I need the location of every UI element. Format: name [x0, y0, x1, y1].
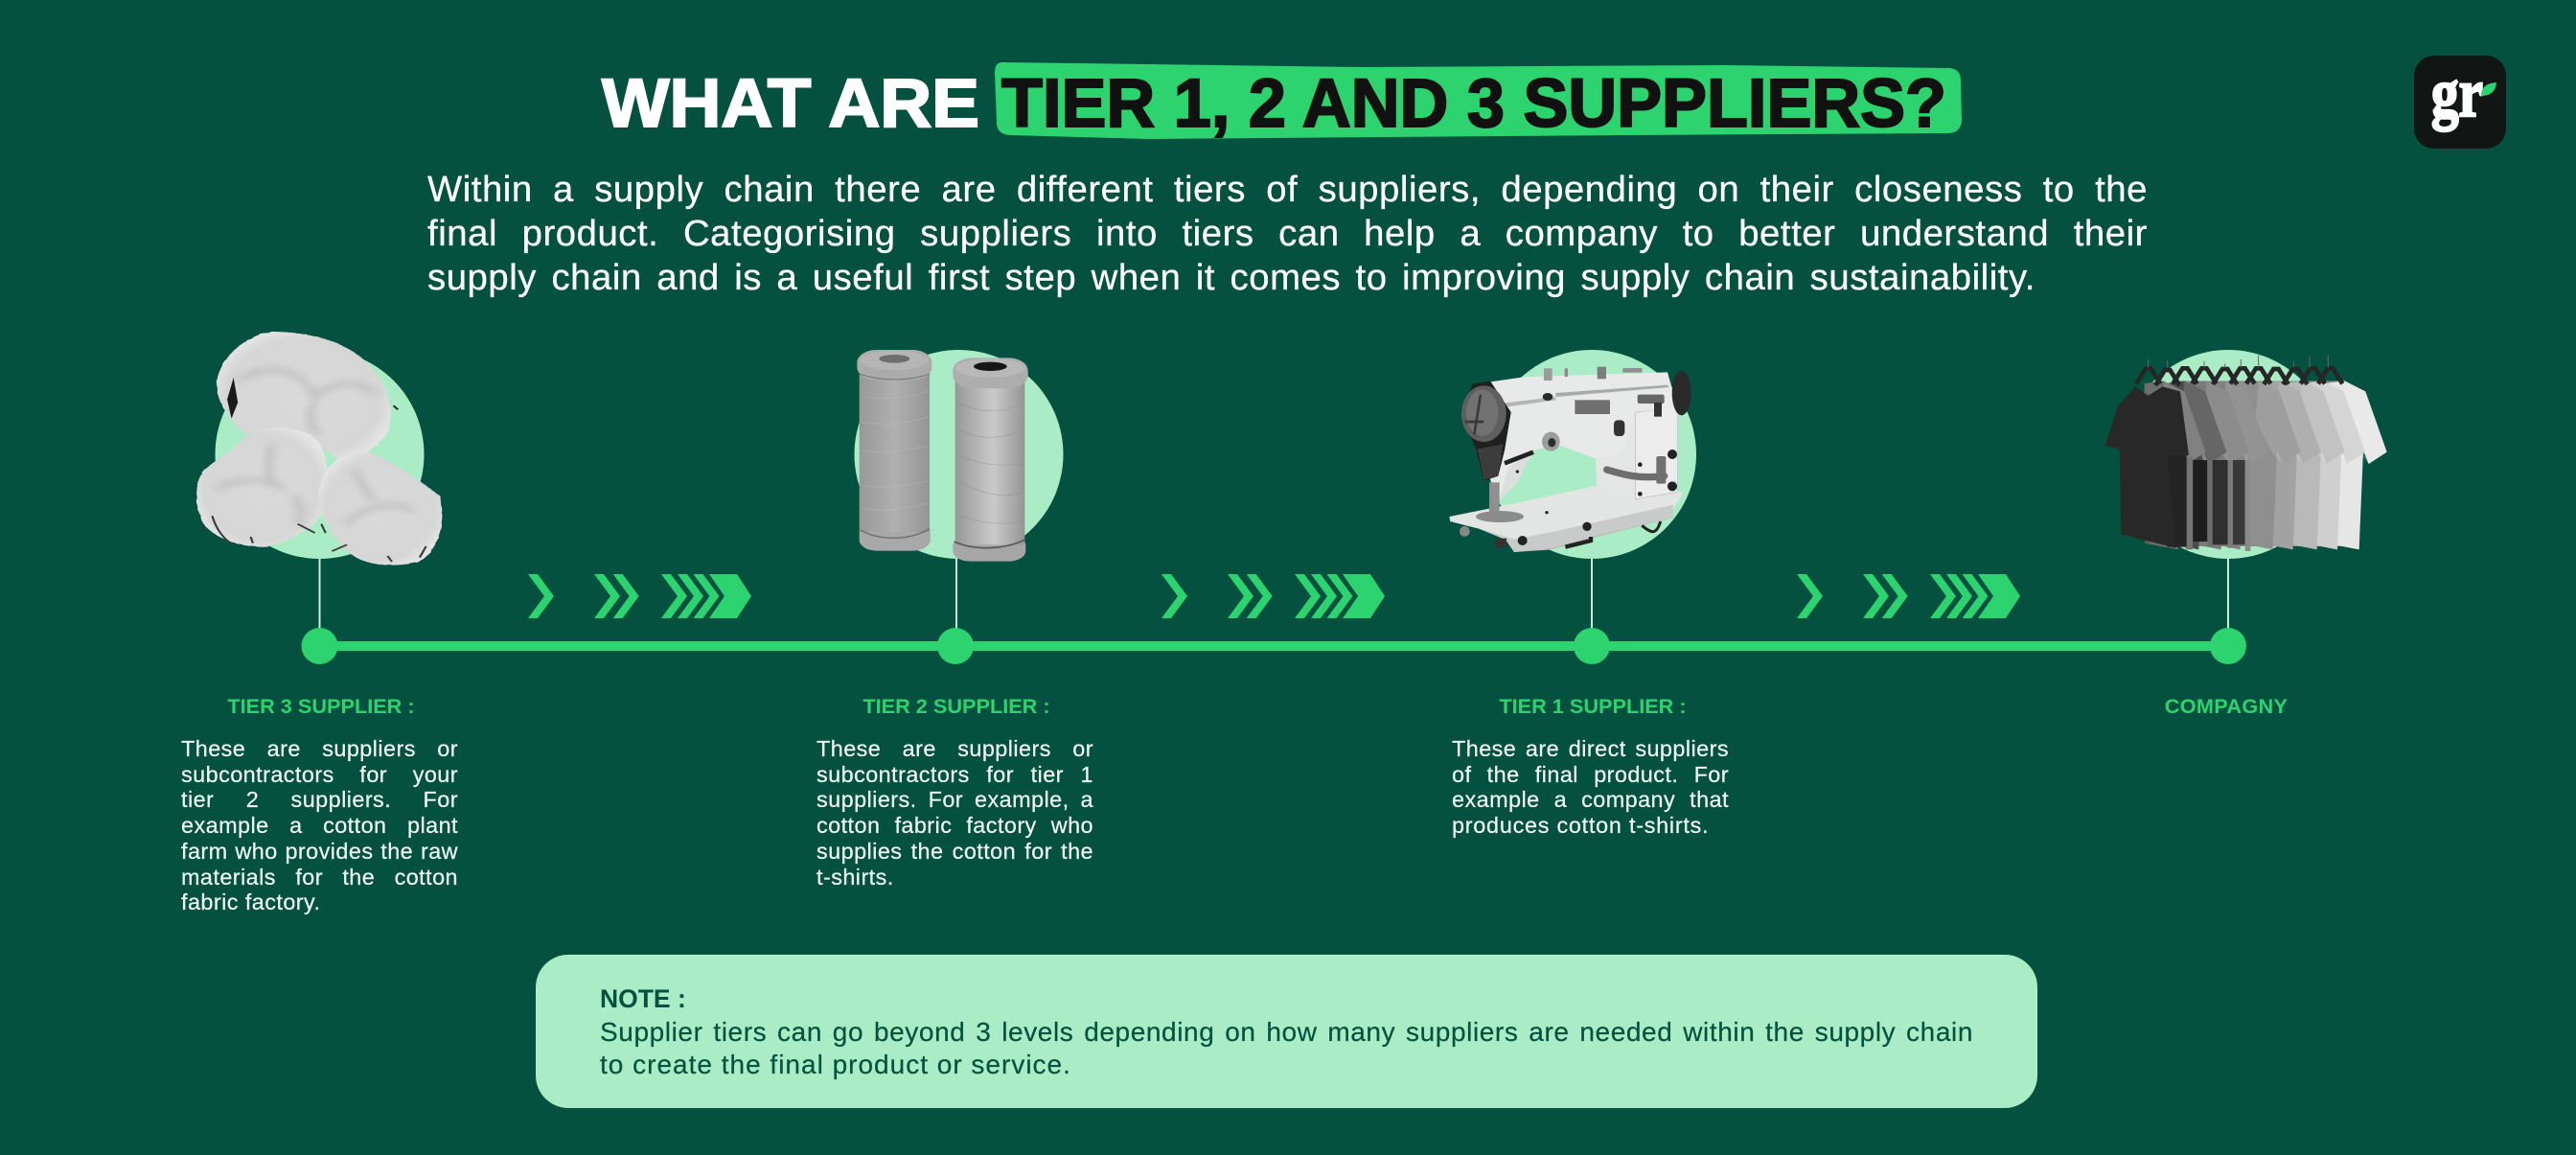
text: tier 2 description: t-shirts.	[816, 865, 894, 889]
text: tier 3 description: fabric factory.	[181, 889, 320, 914]
heading: tier 1: TIER 1 SUPPLIER :	[1499, 694, 1687, 718]
arrows: tier 3 to tier 2	[528, 574, 751, 618]
logo: gr	[2431, 55, 2483, 131]
text: tier 3 description: farm who provides the raw	[181, 839, 458, 864]
text: tier 3 description: materials for the cotton	[181, 865, 458, 889]
text: tier 2 description	[816, 736, 1093, 889]
icon: t-shirts on rack	[2104, 355, 2387, 551]
text: tier 3 description: subcontractors for your	[181, 762, 458, 787]
logo	[2414, 55, 2506, 149]
text: tier 1 description: produces cotton t-shirts.	[1452, 813, 1709, 838]
note text: Supplier tiers can go beyond 3 levels depending on how many suppliers are needed within the supply chain	[600, 1017, 1973, 1047]
note label: NOTE :	[600, 984, 686, 1013]
icon: thread spools	[857, 350, 1028, 562]
text: tier 2 description: cotton fabric factory who	[816, 813, 1093, 838]
text: tier 1 description: of the final product. For	[1452, 762, 1729, 787]
heading: tier 3: TIER 3 SUPPLIER :	[227, 694, 415, 718]
intro paragraph	[427, 169, 2148, 298]
note text: to create the final product or service.	[600, 1050, 1071, 1079]
text: tier 2 description: suppliers. For example, a	[816, 787, 1093, 812]
icon: sewing machine	[1449, 366, 1691, 552]
text: tier 1 description: example a company that	[1452, 787, 1729, 812]
icon: cotton bolls	[196, 332, 443, 566]
title dark text: TIER 1, 2 AND 3 SUPPLIERS?	[1001, 66, 1946, 142]
intro paragraph: Within a supply chain there are different tiers of suppliers, depending on their closeness to the	[427, 169, 2148, 210]
heading: tier 2: TIER 2 SUPPLIER :	[862, 694, 1050, 718]
intro paragraph: supply chain and is a useful first step when it comes to improving supply chain sustainability.	[427, 257, 2036, 298]
arrows: tier 1 to company	[1797, 574, 2020, 618]
illustration backdrop circles	[215, 350, 2301, 559]
note text	[600, 1017, 1973, 1079]
heading: company: COMPAGNY	[2165, 694, 2288, 718]
text: tier 3 description: example a cotton plant	[181, 813, 458, 838]
title	[600, 62, 1962, 142]
intro paragraph: final product. Categorising suppliers into tiers can help a company to better understand their	[427, 213, 2148, 254]
arrows: tier 2 to tier 1	[1162, 574, 1385, 618]
text: tier 3 description	[181, 736, 458, 914]
text: tier 2 description: These are suppliers or	[816, 736, 1093, 761]
text: tier 2 description: supplies the cotton for the	[816, 839, 1093, 864]
timeline	[301, 559, 2246, 664]
text: tier 3 description: tier 2 suppliers. For	[181, 787, 458, 812]
title white text: WHAT ARE	[602, 66, 979, 142]
text: tier 1 description: These are direct suppliers	[1452, 736, 1729, 761]
text: tier 1 description	[1452, 736, 1729, 838]
title highlight swash	[995, 62, 1962, 139]
text: tier 2 description: subcontractors for tier 1	[816, 762, 1093, 787]
note box	[536, 955, 2037, 1108]
text: tier 3 description: These are suppliers or	[181, 736, 458, 761]
